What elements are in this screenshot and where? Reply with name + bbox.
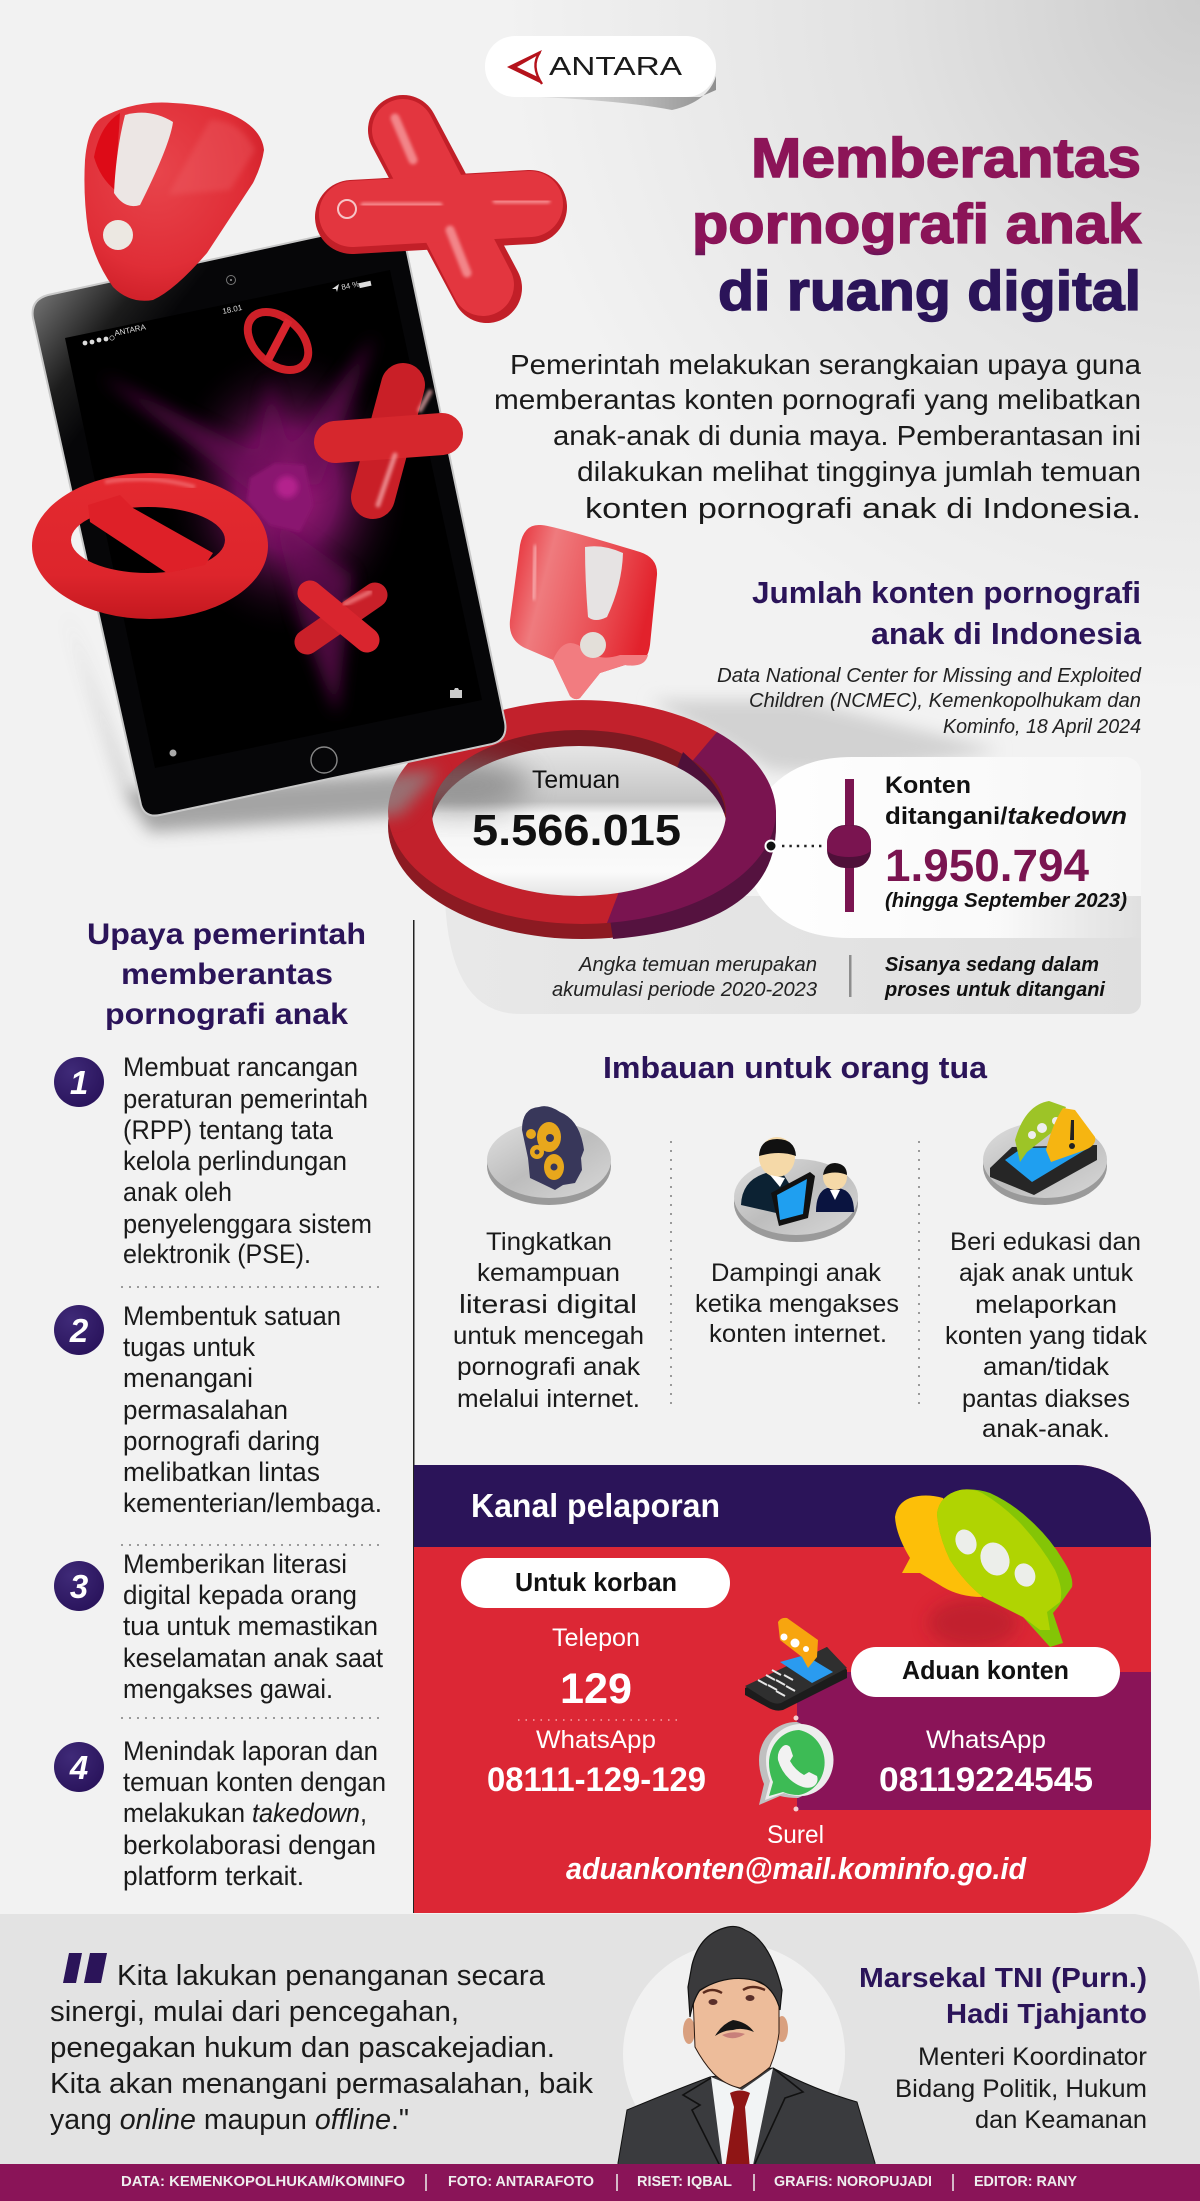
- number 4: [54, 1742, 104, 1792]
- icon: head with gears: [487, 1106, 611, 1205]
- role: Bidang Politik, Hukum: [895, 2075, 1147, 2103]
- step 4: melakukan takedown,: [123, 1798, 367, 1828]
- surel: aduankonten@mail.kominfo.go.id: [566, 1851, 1027, 1886]
- pill: untuk korban: Untuk korban: [515, 1567, 677, 1597]
- step 2: pornografi daring: [123, 1426, 320, 1456]
- whatsapp korban: 08111-129-129: [487, 1761, 706, 1799]
- takedown value: 1.950.794: [885, 840, 1089, 891]
- divider: [413, 920, 414, 1913]
- number 2: 2: [69, 1312, 89, 1349]
- title: [692, 126, 1142, 322]
- icon: feature phone: [745, 1618, 847, 1711]
- step 2: kementerian/lembaga.: [123, 1488, 382, 1518]
- imbauan text 2: [695, 1259, 899, 1348]
- quote text: yang online maupun offline.": [50, 2104, 409, 2136]
- white takedown panel: [742, 757, 1141, 938]
- step 4: platform terkait.: [123, 1861, 304, 1891]
- step 2: tugas untuk: [123, 1332, 255, 1362]
- name: [859, 1962, 1147, 2029]
- heading: upaya pemerintah: memberantas: [121, 958, 333, 991]
- intro text: [494, 349, 1141, 525]
- heading: upaya pemerintah: Upaya pemerintah: [87, 918, 366, 951]
- intro text: konten pornografi anak di Indonesia.: [585, 493, 1141, 525]
- icon: large red cross: [338, 118, 548, 288]
- whatsapp aduan: WhatsApp: [926, 1726, 1046, 1754]
- source note: Children (NCMEC), Kemenkopolhukam dan: [749, 690, 1141, 712]
- quote mark: [63, 1953, 107, 1983]
- imbauan text 1: kemampuan: [477, 1259, 620, 1287]
- logo: ANTARA: ANTARA: [549, 51, 683, 81]
- role: dan Keamanan: [975, 2106, 1147, 2134]
- step 1: elektronik (PSE).: [123, 1239, 311, 1269]
- step 1: Membuat rancangan: [123, 1052, 358, 1082]
- step 2: permasalahan: [123, 1395, 288, 1425]
- source note: Kominfo, 18 April 2024: [943, 716, 1141, 738]
- imbauan text 2: konten internet.: [709, 1320, 887, 1348]
- status bar: ANTARA: [114, 322, 147, 338]
- panel: quote: [0, 1914, 1200, 2164]
- temuan value: Temuan: [532, 766, 620, 794]
- whatsapp korban: [487, 1726, 706, 1799]
- donut chart: [388, 700, 822, 939]
- tablet: [33, 221, 505, 832]
- number 1: 1: [70, 1064, 88, 1101]
- heading: kanal: Kanal pelaporan: [471, 1487, 720, 1524]
- imbauan text 3: melaporkan: [975, 1291, 1117, 1319]
- imbauan text 3: aman/tidak: [983, 1353, 1110, 1381]
- quote text: penegakan hukum dan pascakejadian.: [50, 2032, 555, 2064]
- title: Memberantas: [751, 126, 1141, 189]
- name: Marsekal TNI (Purn.): [859, 1962, 1147, 1993]
- note text: Sisanya sedang dalam: [885, 954, 1099, 976]
- imbauan text 1: Tingkatkan: [486, 1228, 612, 1256]
- step 4: temuan konten dengan: [123, 1767, 386, 1797]
- number 3: [54, 1561, 104, 1611]
- quote text: sinergi, mulai dari pencegahan,: [50, 1996, 459, 2028]
- number 1: [54, 1057, 104, 1107]
- takedown marker: [827, 779, 871, 912]
- panel: grey note: [445, 757, 1141, 1014]
- footer credits: DATA: KEMENKOPOLHUKAM/KOMINFO: [121, 2173, 405, 2190]
- step 4: Menindak laporan dan: [123, 1736, 378, 1766]
- step 1: anak oleh: [123, 1177, 232, 1207]
- intro text: anak-anak di dunia maya. Pemberantasan ini: [553, 420, 1141, 451]
- imbauan text 3: Beri edukasi dan: [950, 1228, 1141, 1256]
- imbauan text 3: anak-anak.: [982, 1415, 1110, 1443]
- portrait: [618, 1926, 875, 2170]
- intro text: Pemerintah melakukan serangkaian upaya guna: [510, 349, 1141, 380]
- telepon: 129: [560, 1665, 632, 1713]
- title: di ruang digital: [718, 259, 1141, 322]
- icon: small red cross: [307, 592, 375, 642]
- step 3: mengakses gawai.: [123, 1674, 333, 1704]
- imbauan text 1: melalui internet.: [457, 1385, 640, 1413]
- number 2: [54, 1305, 104, 1355]
- note text: akumulasi periode 2020-2023: [552, 979, 817, 1001]
- icon: red exclamation bubble: [84, 103, 264, 301]
- icon: medium red cross: [335, 385, 442, 505]
- name: Hadi Tjahjanto: [946, 1998, 1147, 2029]
- takedown value: [885, 772, 1127, 912]
- icon: speech bubble with exclamation: [510, 525, 657, 699]
- status bar: 84 %: [341, 279, 360, 292]
- whatsapp aduan: 08119224545: [879, 1761, 1093, 1799]
- step 1: peraturan pemerintah: [123, 1084, 368, 1114]
- icon: chat bubbles: [895, 1489, 1072, 1647]
- note text: proses untuk ditangani: [884, 979, 1105, 1001]
- temuan value: 5.566.015: [472, 806, 681, 855]
- imbauan text 1: literasi digital: [459, 1289, 637, 1319]
- telepon: Telepon: [552, 1624, 640, 1652]
- footer credits: GRAFIS: NOROPUJADI: [774, 2173, 932, 2190]
- imbauan text 3: ajak anak untuk: [959, 1259, 1133, 1287]
- imbauan text 2: Dampingi anak: [711, 1259, 882, 1287]
- step 3: [54, 1549, 383, 1704]
- role: [895, 2043, 1147, 2134]
- number 4: 4: [69, 1749, 88, 1786]
- takedown value: (hingga September 2023): [885, 890, 1127, 912]
- note text: [552, 954, 1105, 1001]
- imbauan text 3: pantas diakses: [962, 1385, 1130, 1413]
- step 3: Memberikan literasi: [123, 1549, 347, 1579]
- step 4: [54, 1736, 386, 1891]
- pill: aduan konten: Aduan konten: [902, 1655, 1069, 1685]
- status bar: 18.01: [222, 303, 244, 316]
- pill: aduan konten: [851, 1647, 1120, 1697]
- imbauan text 3: [945, 1228, 1148, 1443]
- icon: whatsapp: [759, 1716, 834, 1812]
- step 3: tua untuk memastikan: [123, 1611, 378, 1641]
- quote text: Kita akan menangani permasalahan, baik: [50, 2068, 593, 2100]
- icon: parent and child with tablet: [734, 1137, 858, 1242]
- step 1: kelola perlindungan: [123, 1146, 347, 1176]
- step 1: penyelenggara sistem: [123, 1209, 372, 1239]
- step 2: menangani: [123, 1363, 253, 1393]
- quote text: [50, 1960, 593, 2136]
- takedown value: Konten: [885, 772, 971, 799]
- panel: kanal pelaporan: [414, 1465, 1151, 1913]
- footer credits: FOTO: ANTARAFOTO: [448, 2173, 594, 2190]
- imbauan text 1: untuk mencegah: [453, 1322, 644, 1350]
- takedown value: ditangani/ takedown: [885, 803, 1127, 830]
- footer credits: EDITOR: RANY: [974, 2173, 1077, 2190]
- icon: large no-entry sign: [32, 473, 268, 619]
- role: Menteri Koordinator: [918, 2043, 1147, 2071]
- number 3: 3: [70, 1568, 88, 1605]
- imbauan text 2: ketika mengakses: [695, 1290, 899, 1318]
- intro text: memberantas konten pornografi yang melibatkan: [494, 384, 1141, 415]
- telepon: [552, 1624, 640, 1713]
- footer credits: [0, 2164, 1200, 2201]
- step 2: melibatkan lintas: [123, 1457, 320, 1487]
- pill: untuk korban: [461, 1558, 730, 1608]
- note text: Angka temuan merupakan: [578, 954, 817, 976]
- heading: jumlah konten: [752, 575, 1142, 651]
- surel: Surel: [767, 1821, 824, 1849]
- step 4: berkolaborasi dengan: [123, 1830, 376, 1860]
- surel: [566, 1821, 1027, 1886]
- step 2: Membentuk satuan: [123, 1301, 341, 1331]
- heading: jumlah konten: anak di Indonesia: [871, 616, 1142, 651]
- status bar: [83, 276, 462, 773]
- whatsapp aduan: [879, 1726, 1093, 1799]
- whatsapp korban: WhatsApp: [536, 1726, 656, 1754]
- step 2: [54, 1301, 382, 1518]
- step 3: digital kepada orang: [123, 1580, 357, 1610]
- footer credits: RISET: IQBAL: [637, 2173, 732, 2190]
- logo: ANTARA: [485, 36, 716, 110]
- step 1: [54, 1052, 372, 1269]
- imbauan text 1: pornografi anak: [457, 1353, 641, 1381]
- source note: Data National Center for Missing and Exploited: [717, 665, 1142, 687]
- temuan value: [472, 766, 681, 855]
- imbauan text 3: konten yang tidak: [945, 1322, 1148, 1350]
- icon: phone with alert bubbles: [983, 1101, 1107, 1205]
- step 1: (RPP) tentang tata: [123, 1115, 334, 1145]
- heading: jumlah konten: Jumlah konten pornografi: [752, 575, 1141, 610]
- heading: upaya pemerintah: pornografi anak: [105, 998, 348, 1031]
- intro text: dilakukan melihat tingginya jumlah temuan: [577, 456, 1141, 487]
- step 3: keselamatan anak saat: [123, 1643, 383, 1673]
- wallpaper burst: [100, 335, 412, 715]
- quote text: Kita lakukan penanganan secara: [117, 1960, 546, 1992]
- heading: imbauan: Imbauan untuk orang tua: [603, 1050, 988, 1085]
- icon: small no-entry sign: [237, 300, 319, 382]
- imbauan text 1: [453, 1228, 644, 1413]
- title: pornografi anak: [692, 192, 1142, 255]
- heading: upaya pemerintah: [87, 918, 366, 1031]
- source note: [717, 665, 1142, 738]
